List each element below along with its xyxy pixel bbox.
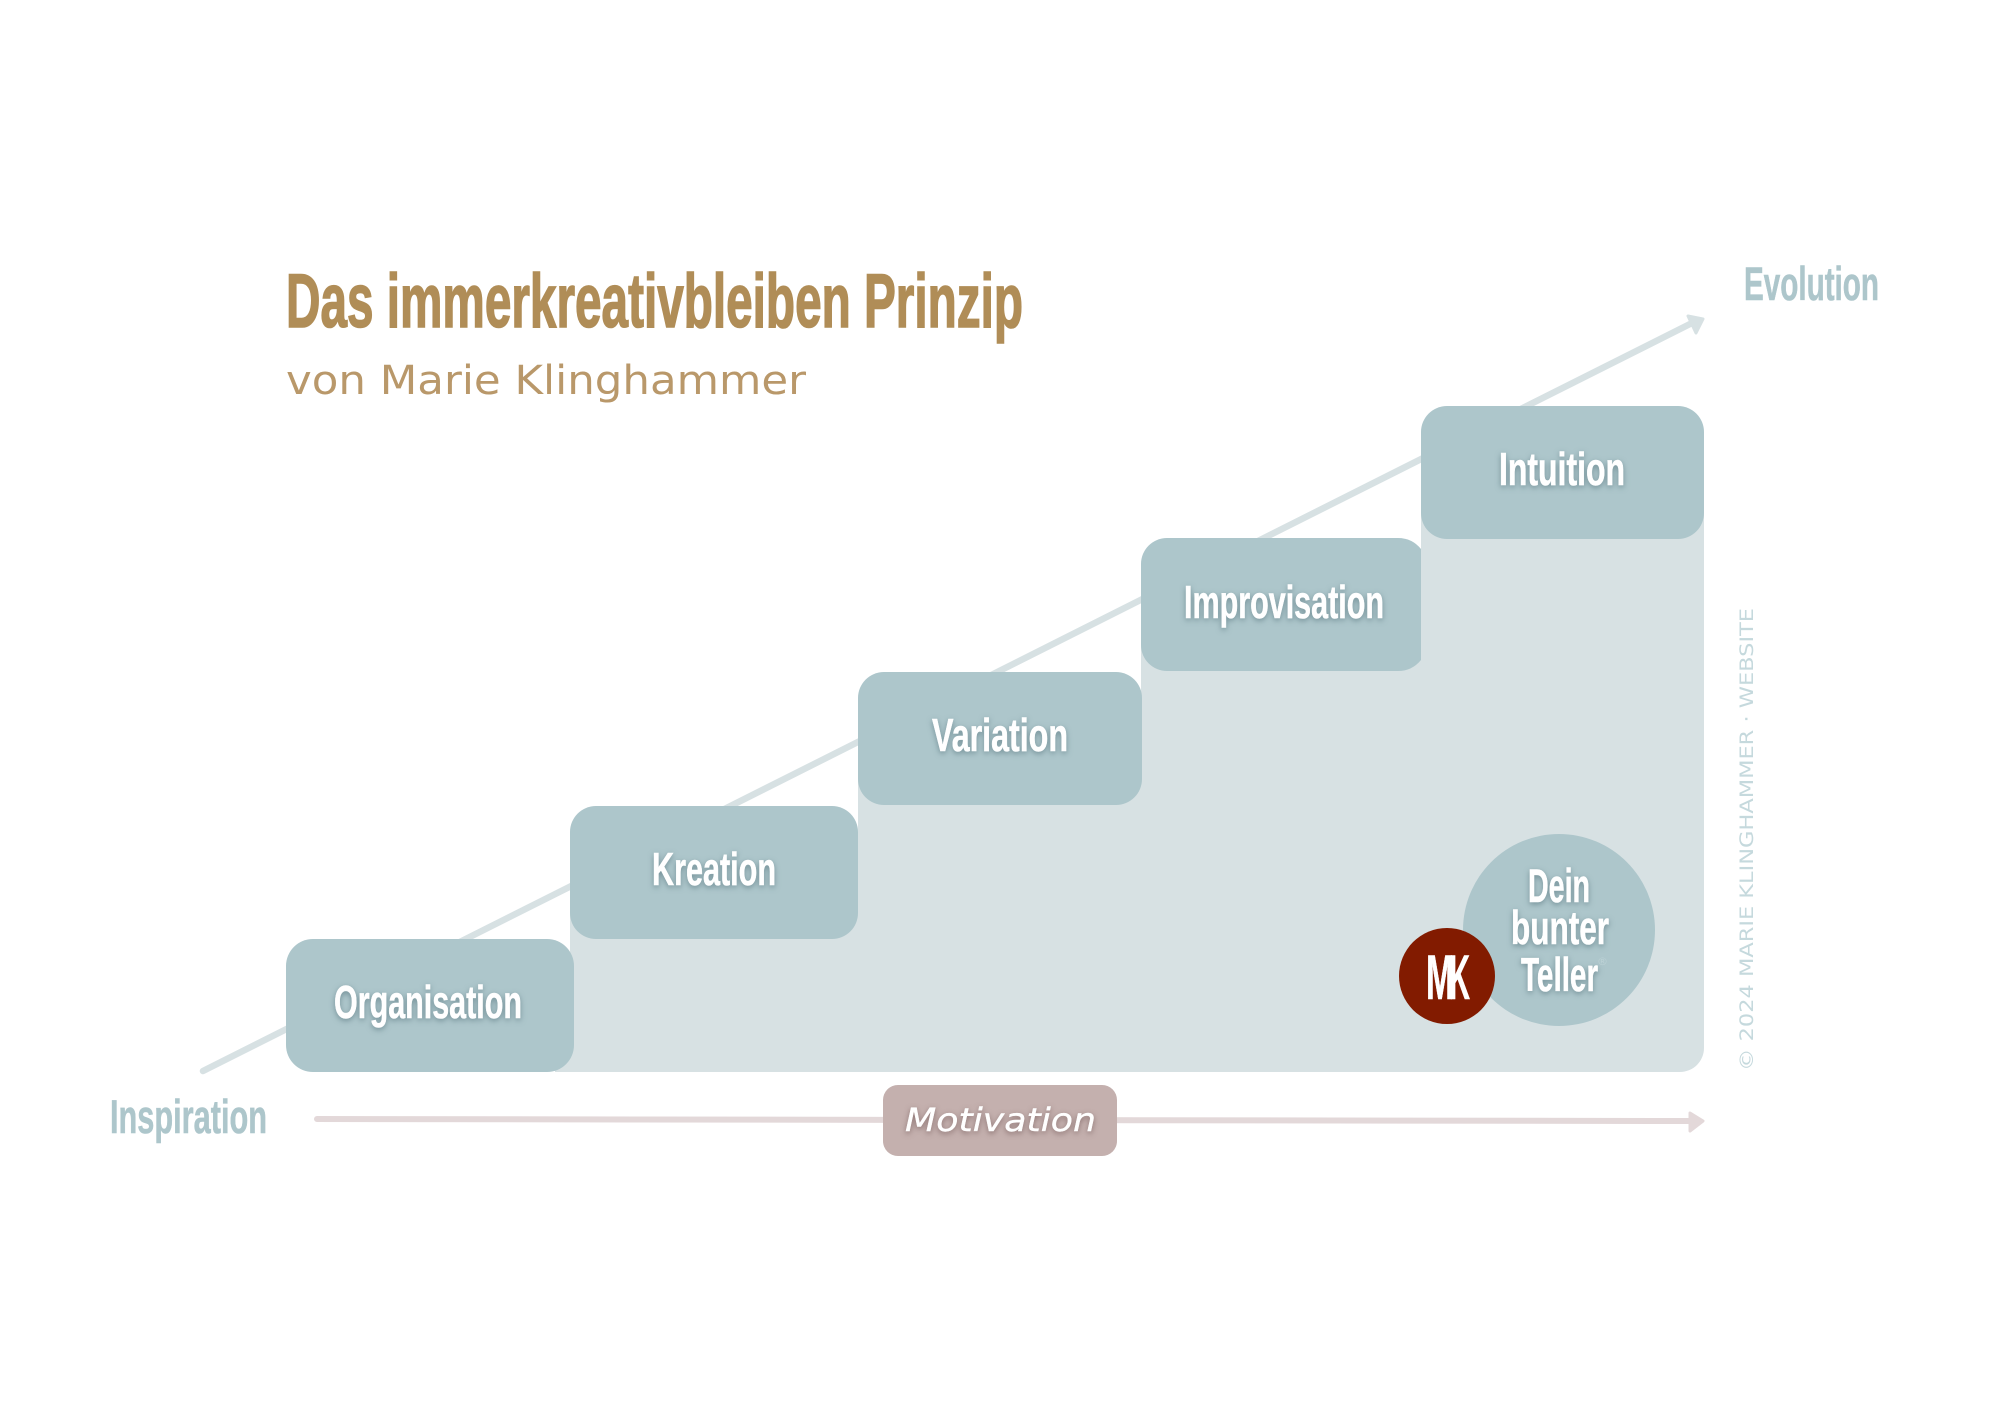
logo: MK: M (1426, 943, 1454, 1013)
circle: Dein bunter Teller: Teller (1521, 948, 1598, 1001)
badge: Motivation: Motivation (905, 1101, 1096, 1139)
step: Improvisation (1141, 538, 1421, 671)
title: Das immerkreativbleiben Prinzip (286, 259, 1023, 344)
label: Inspiration: Inspiration (110, 1090, 267, 1143)
circle: Dein bunter Teller: bunter (1511, 901, 1609, 954)
label: Evolution: Evolution (1744, 257, 1879, 310)
arrow: evolution diagonal (203, 316, 1703, 1071)
copyright vertical text: © 2024 MARIE KLINGHAMMER · WEBSITE (1736, 608, 1758, 1071)
step: Variation (858, 672, 1142, 805)
step: Kreation: Kreation (652, 843, 776, 895)
staircase background (555, 470, 1704, 1072)
step: Intuition: Intuition (1499, 443, 1625, 495)
logo: MK (1399, 928, 1495, 1024)
subtitle: von Marie Klinghammer (286, 358, 807, 404)
badge: Motivation (883, 1085, 1117, 1156)
circle: Dein bunter Teller (1463, 834, 1655, 1026)
step: Improvisation: Improvisation (1184, 576, 1384, 628)
arrow: motivation horizontal (317, 1113, 1703, 1131)
step: Kreation (570, 806, 858, 939)
step: Organisation (286, 939, 574, 1072)
circle: Dein bunter Teller: Dein (1528, 859, 1590, 912)
circle: Dein bunter Teller: ® (1597, 955, 1608, 968)
step: Variation: Variation (932, 709, 1068, 761)
step: Intuition (1421, 406, 1704, 539)
logo: MK: K (1449, 943, 1470, 1013)
step: Organisation: Organisation (334, 976, 522, 1028)
